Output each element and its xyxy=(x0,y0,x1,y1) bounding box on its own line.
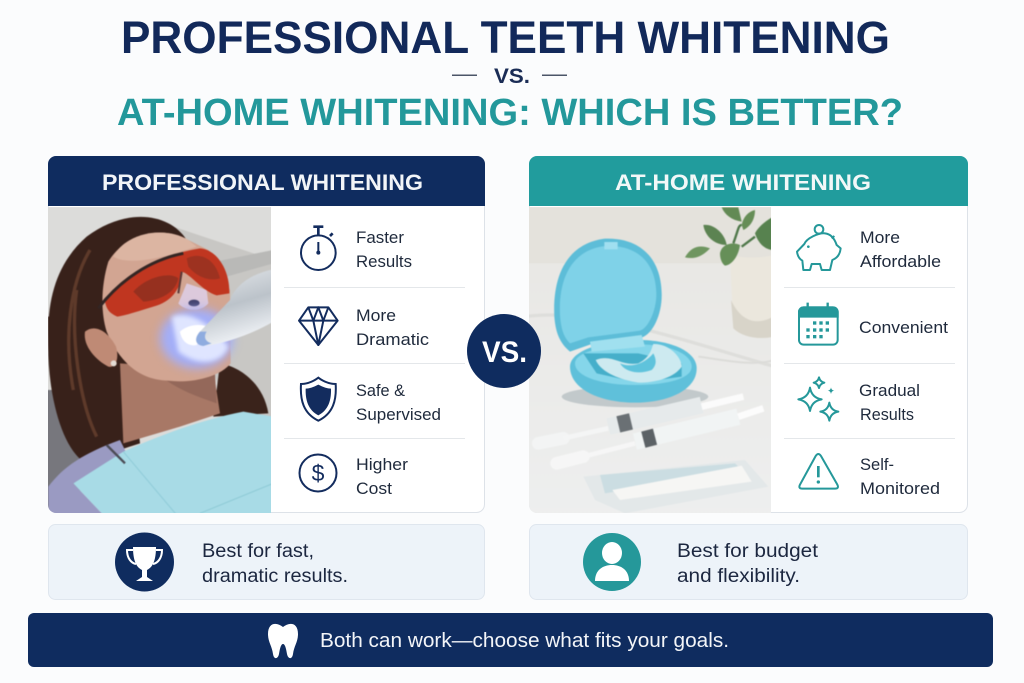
icon: dollar coin xyxy=(300,454,336,492)
text: faster results: Results xyxy=(356,252,412,271)
face xyxy=(102,233,231,381)
header: professional whitening xyxy=(48,156,485,206)
icon: piggy bank xyxy=(797,225,841,270)
icon: sparkles xyxy=(798,377,838,421)
text: gradual results: Results xyxy=(860,405,914,424)
text: best for budget: Best for budget xyxy=(677,541,819,562)
text: best for fast: dramatic results. xyxy=(202,566,348,587)
header: professional whitening: PROFESSIONAL WHITENING xyxy=(102,170,423,195)
icon: diamond xyxy=(299,307,338,345)
title: AT-HOME WHITENING: WHICH IS BETTER? xyxy=(117,92,903,134)
feature list: at-home xyxy=(784,225,955,498)
case base xyxy=(570,340,697,403)
text: higher cost xyxy=(356,455,408,498)
icon: stopwatch xyxy=(301,227,336,270)
text: safe and supervised: Supervised xyxy=(356,405,441,424)
case shadow xyxy=(562,386,708,407)
title: VS. xyxy=(494,65,530,88)
icon: calendar xyxy=(799,303,838,345)
photo: patient receiving light whitening treatment xyxy=(40,207,273,517)
vs badge: VS. xyxy=(482,336,527,369)
hair xyxy=(48,216,186,422)
text: more affordable: Affordable xyxy=(860,252,941,271)
text: best for fast xyxy=(202,541,348,587)
nose xyxy=(178,283,208,310)
text: safe and supervised: Safe & xyxy=(356,381,406,400)
text: safe and supervised xyxy=(356,381,441,424)
icon: shield xyxy=(301,378,336,421)
text: best for budget xyxy=(677,541,819,587)
panel: at-home whitening xyxy=(525,156,968,520)
callout: best for fast results xyxy=(48,524,484,600)
feature list: professional xyxy=(284,227,465,498)
text: gradual results xyxy=(859,381,920,424)
icon: trophy xyxy=(115,532,174,592)
text: best for budget: and flexibility. xyxy=(677,566,800,587)
text: higher cost: Cost xyxy=(356,479,392,498)
panel: professional whitening xyxy=(40,156,485,517)
icon: tooth xyxy=(268,624,298,658)
plant xyxy=(732,283,771,320)
ear xyxy=(85,328,117,367)
shirt xyxy=(48,440,127,515)
icon: dollar coin: $ xyxy=(312,460,325,486)
photo: at-home whitening kit xyxy=(525,207,775,520)
aligner tray xyxy=(596,344,682,383)
bottom banner xyxy=(28,613,993,667)
whitening strips xyxy=(583,460,768,513)
bib xyxy=(73,412,273,515)
text: higher cost: Higher xyxy=(356,455,408,474)
text: self-monitored: Monitored xyxy=(860,479,940,498)
text: more affordable xyxy=(860,228,941,271)
text: more dramatic: More xyxy=(356,306,396,325)
text: self-monitored xyxy=(860,455,940,498)
icon: person xyxy=(583,533,641,591)
whitening wand xyxy=(196,269,273,346)
blue glow xyxy=(160,308,233,368)
text: more affordable: More xyxy=(860,228,900,247)
text: faster results xyxy=(356,228,412,271)
text: self-monitored: Self- xyxy=(860,455,894,474)
text: faster results: Faster xyxy=(356,228,404,247)
text: convenient: Convenient xyxy=(859,318,948,337)
header: at-home whitening: AT-HOME WHITENING xyxy=(615,170,871,195)
syringe 1 xyxy=(538,397,743,443)
title: PROFESSIONAL TEETH WHITENING xyxy=(121,12,890,63)
banner text: Both can work—choose what fits your goals. xyxy=(320,630,729,652)
neck xyxy=(120,363,220,443)
text: best for fast: Best for fast, xyxy=(202,541,314,562)
hinge xyxy=(590,335,645,352)
vs badge xyxy=(467,314,541,388)
header: at-home whitening xyxy=(529,156,968,206)
text: more dramatic: Dramatic xyxy=(356,330,430,349)
text: more dramatic xyxy=(356,306,430,349)
case lid xyxy=(554,239,662,352)
icon: warning triangle xyxy=(799,454,838,489)
goggles xyxy=(100,248,229,317)
callout: best for budget xyxy=(530,524,968,600)
text: gradual results: Gradual xyxy=(859,381,920,400)
syringe 2 xyxy=(557,408,763,463)
title xyxy=(117,12,903,134)
